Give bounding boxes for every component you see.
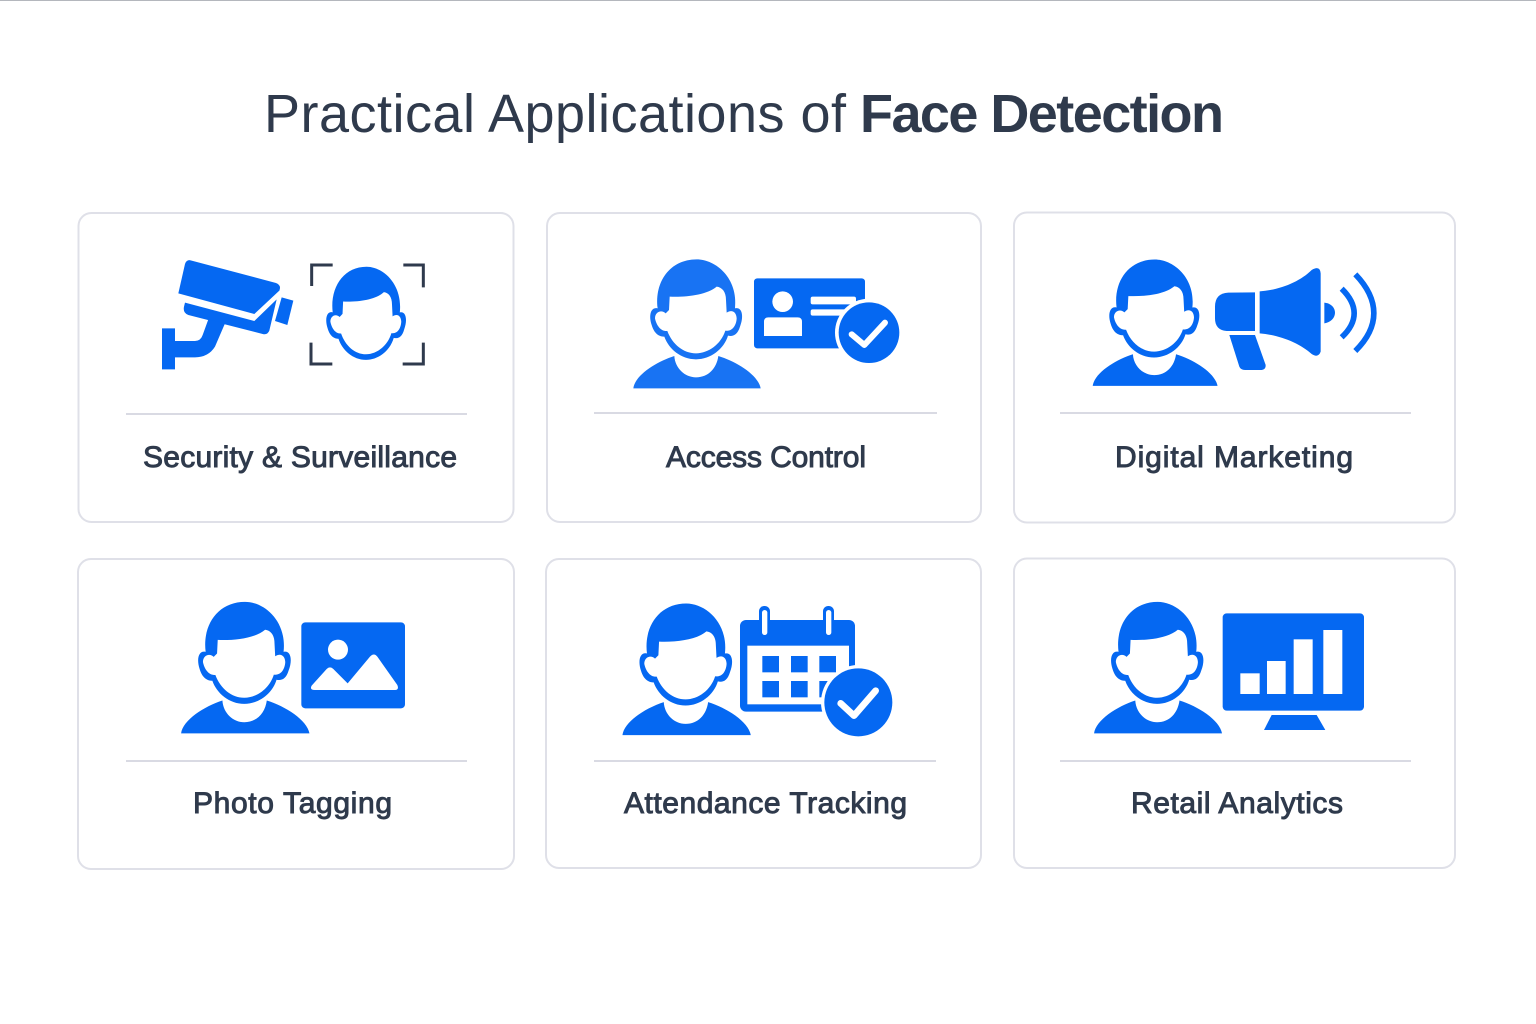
label: Photo Tagging [193, 787, 392, 820]
icon: security camera and face scan [162, 260, 423, 369]
icon: person with megaphone [1093, 259, 1374, 386]
label: Attendance Tracking [624, 787, 907, 820]
panel: Digital Marketing [1014, 212, 1455, 522]
icon: person with analytics monitor [1094, 602, 1364, 733]
panel: Access Control [547, 213, 981, 522]
panel: Security & Surveillance [78, 213, 514, 522]
icon: person with calendar and check [622, 604, 896, 740]
icon: person with photo [181, 602, 405, 733]
title: Face Detection [860, 84, 1224, 144]
label: Access Control [666, 441, 866, 474]
panel: Attendance Tracking [546, 559, 981, 868]
label: Digital Marketing [1115, 441, 1353, 474]
label: Security & Surveillance [143, 441, 457, 474]
label: Retail Analytics [1131, 787, 1343, 820]
panel: Retail Analytics [1014, 558, 1455, 868]
icon: person with ID card and check [633, 259, 903, 388]
panel: Photo Tagging [78, 559, 514, 869]
title: Practical Applications of [264, 84, 847, 144]
